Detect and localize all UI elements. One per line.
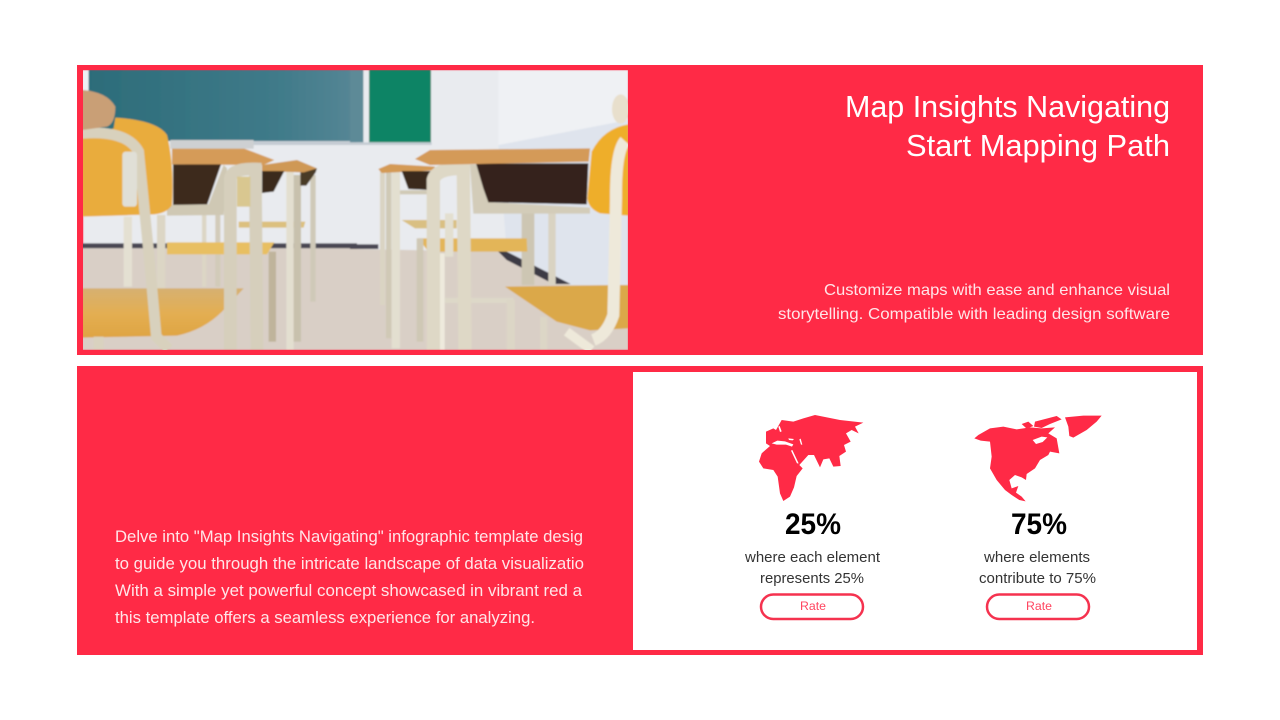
- text: caption 75%: contribute to 75%: [979, 571, 1096, 587]
- panel: top banner: [77, 65, 1203, 355]
- text: caption 25%: where each element: [744, 550, 880, 566]
- heading: title: [845, 89, 1170, 163]
- panel: statistics card: [633, 372, 1197, 650]
- heading: title: Map Insights Navigating: [845, 89, 1170, 124]
- heading: title: Start Mapping Path: [906, 128, 1170, 163]
- text: caption 75%: [979, 550, 1096, 587]
- icon: map of Africa and Eurasia: [759, 415, 863, 501]
- text block: subtitle: [778, 282, 1170, 323]
- text block: description: to guide you through the intricate landscape of data visualizatio: [115, 555, 584, 573]
- text block: description: Delve into "Map Insights Navigating" infographic template desig: [115, 528, 583, 546]
- text block: description: [115, 528, 584, 627]
- text: caption 25%: represents 25%: [760, 571, 864, 587]
- text block: subtitle: storytelling. Compatible with leading design software: [778, 306, 1170, 323]
- panel: bottom section: [77, 366, 1203, 655]
- stat: 75 percent: [974, 416, 1102, 619]
- button: rate: [987, 594, 1089, 619]
- text: caption 75%: where elements: [983, 550, 1090, 566]
- button: rate: Rate: [800, 599, 826, 613]
- figure: 75%: 75%: [1011, 508, 1067, 541]
- icon: map of North America and Greenland: [974, 416, 1102, 501]
- text block: description: this template offers a seamless experience for analyzing.: [115, 609, 535, 627]
- figure: 25%: 25%: [785, 508, 841, 541]
- photo: classroom desks and chairs: [82, 70, 629, 350]
- button: rate: Rate: [1026, 599, 1052, 613]
- text: caption 25%: [744, 550, 880, 587]
- text block: subtitle: Customize maps with ease and enhance visual: [824, 282, 1170, 299]
- button: rate: [761, 594, 863, 619]
- stat: 25 percent: [744, 415, 880, 619]
- text block: description: With a simple yet powerful concept showcased in vibrant red a: [115, 582, 583, 600]
- infographic canvas: [77, 65, 1203, 655]
